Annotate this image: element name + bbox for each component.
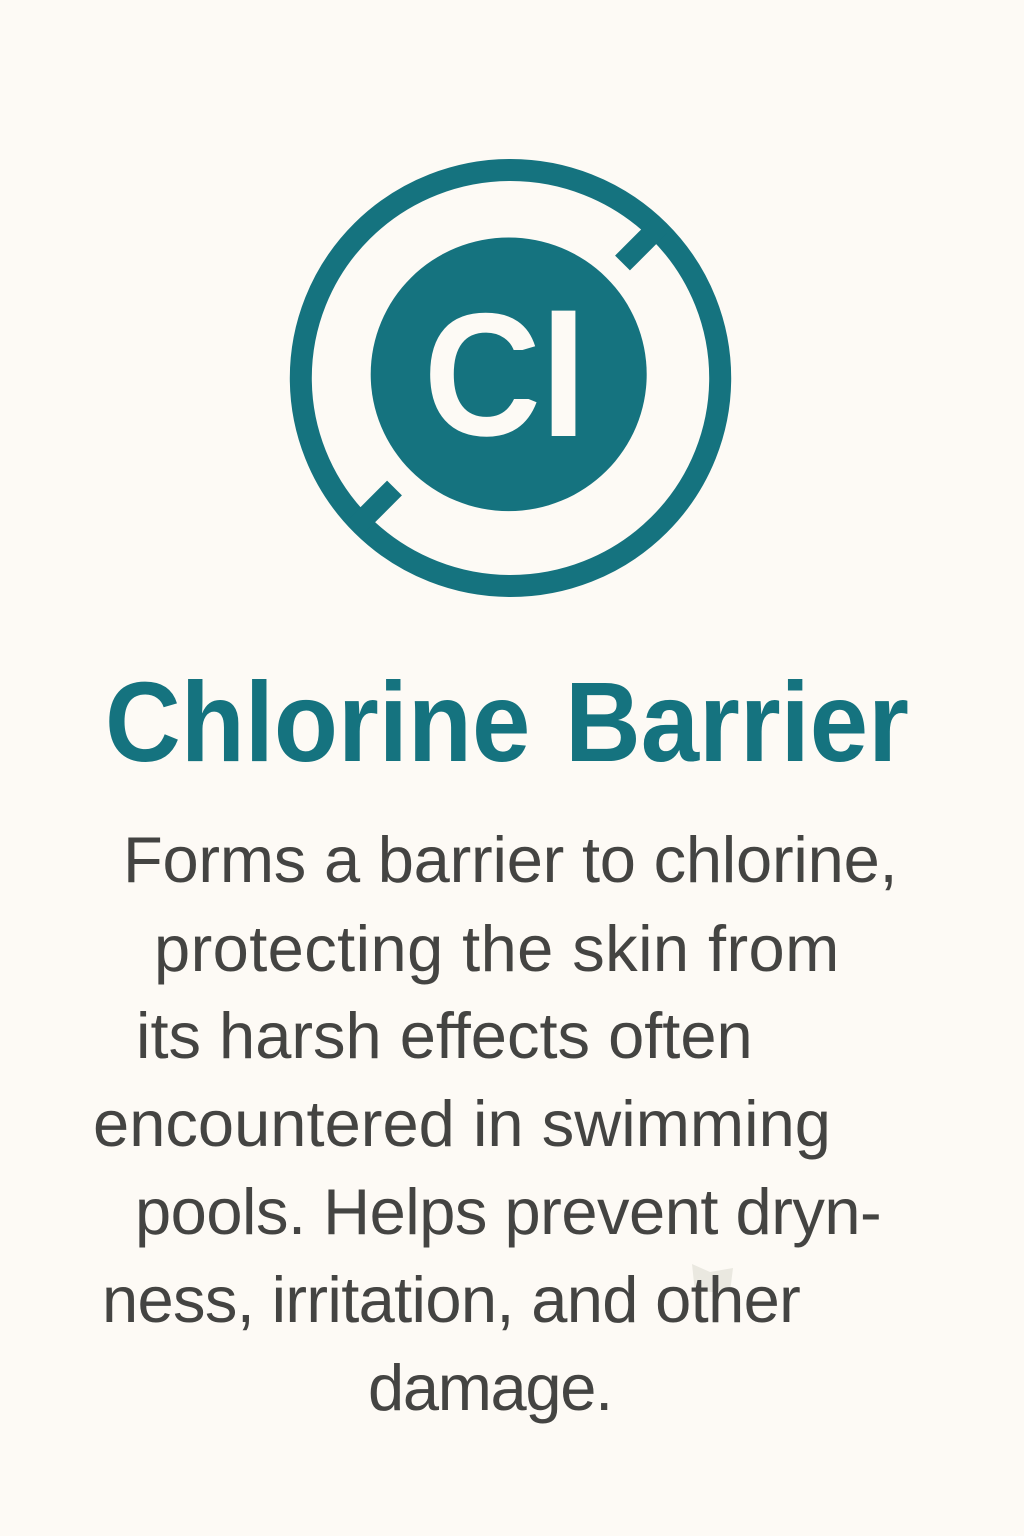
ring tick upper right [622, 226, 660, 263]
description text: encountered in swimming [93, 1087, 831, 1160]
chlorine symbol [424, 277, 588, 473]
inner disc [371, 237, 647, 511]
title: Chlorine Barrier [105, 659, 909, 785]
outer ring [301, 170, 720, 586]
description text [93, 823, 897, 1424]
smudge mark [692, 1264, 733, 1292]
description text: damage. [368, 1351, 612, 1424]
description text: Forms a barrier to chlorine, [123, 823, 897, 896]
icon: chlorine barrier [290, 159, 732, 597]
C terminal trim [490, 350, 542, 399]
description text: pools. Helps prevent dryn- [135, 1175, 881, 1248]
description text: ness, irritation, and other [102, 1263, 800, 1336]
ring tick lower left [358, 488, 394, 524]
description text: protecting the skin from [154, 912, 840, 985]
letter l: l [540, 279, 588, 473]
letter C: C [424, 277, 541, 472]
description text: its harsh effects often [136, 999, 753, 1072]
